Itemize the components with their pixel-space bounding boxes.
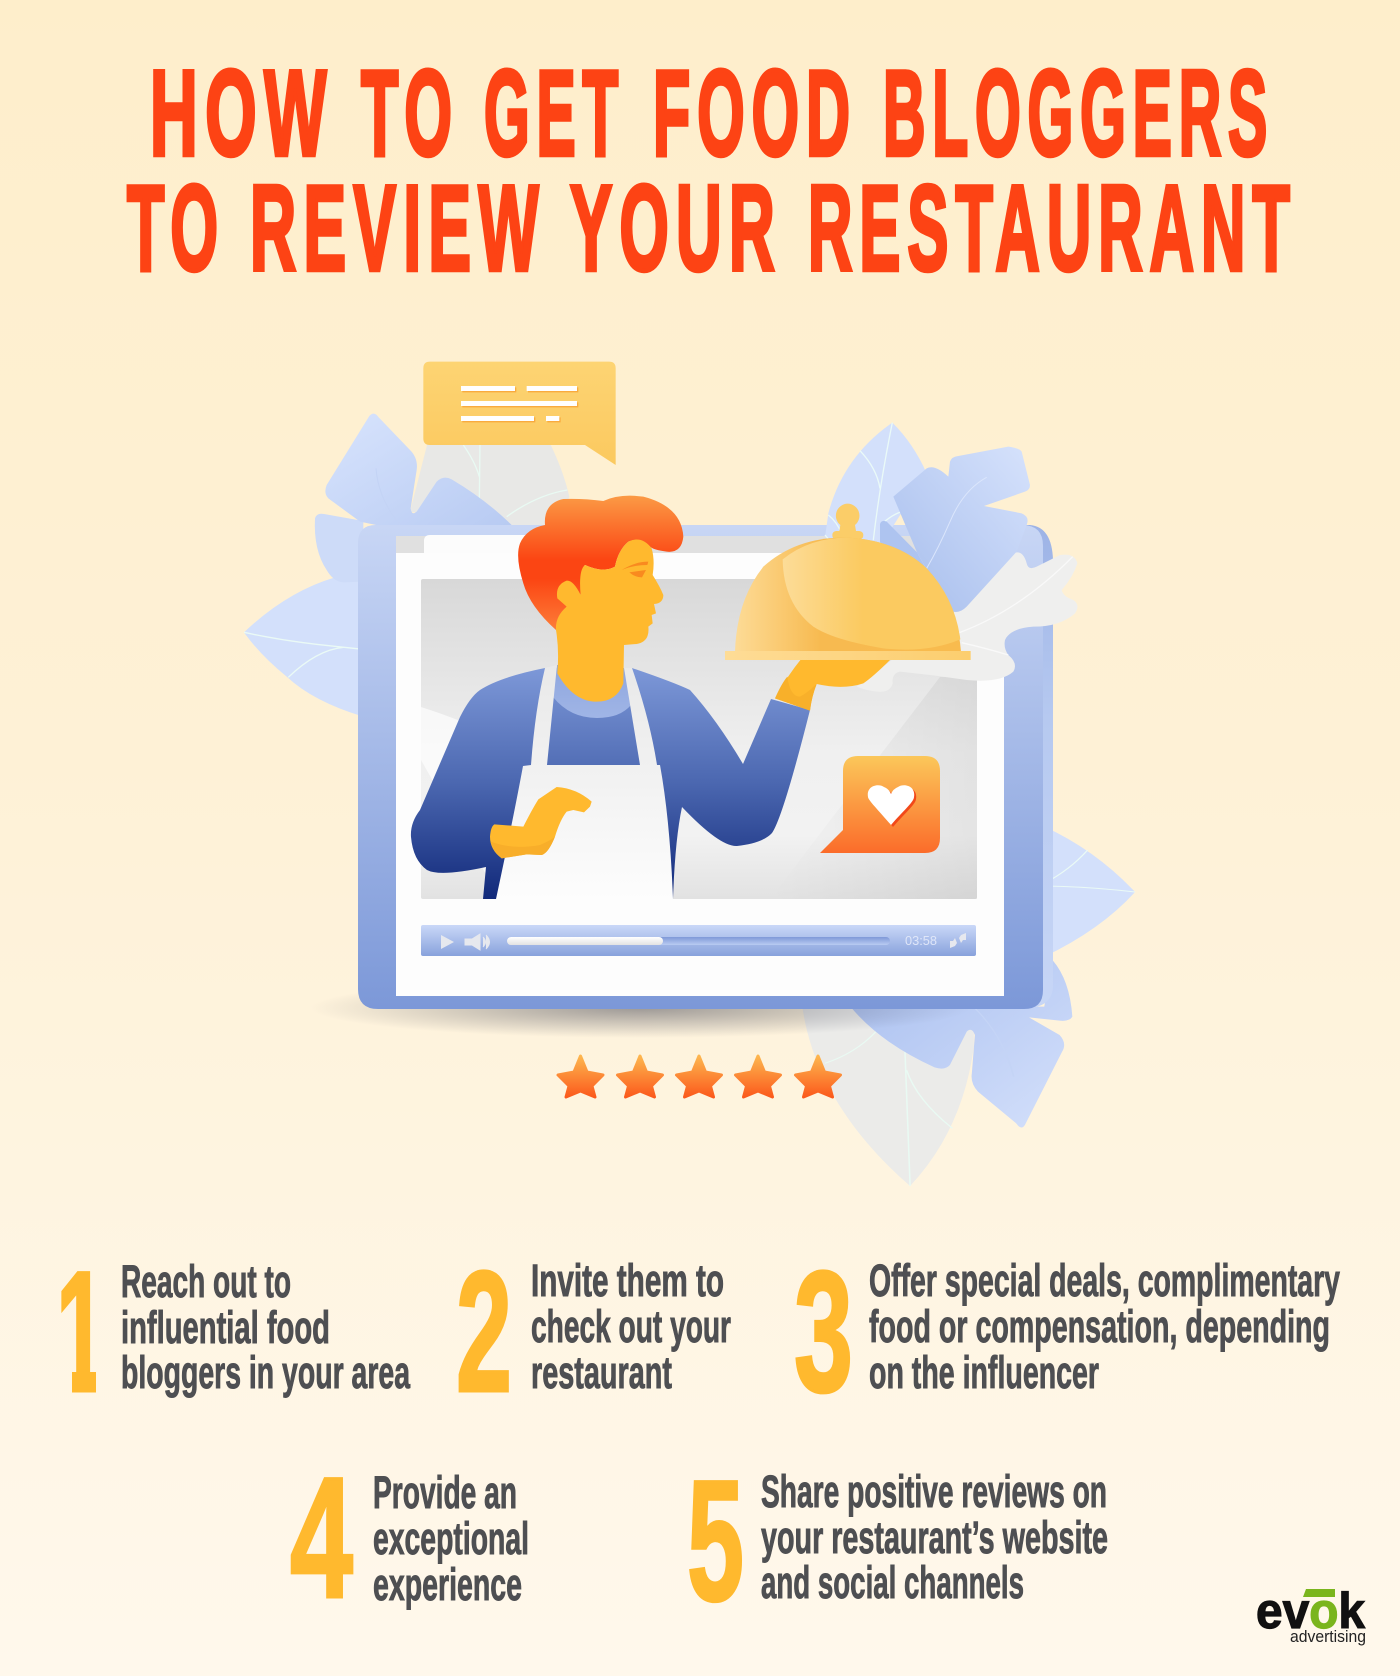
step 5 text: Share positive reviews on bbox=[761, 1466, 1107, 1517]
step 2 text: Invite them to bbox=[531, 1255, 724, 1306]
right hand bbox=[775, 658, 892, 711]
logo bbox=[1256, 1583, 1366, 1646]
step 4 bbox=[290, 1442, 529, 1634]
video player window bbox=[358, 525, 1053, 1009]
screen bbox=[396, 553, 1004, 996]
step 5 text: and social channels bbox=[761, 1557, 1024, 1608]
number 5: 5 bbox=[687, 1445, 744, 1637]
step 1 text: Reach out to bbox=[121, 1256, 291, 1307]
heart bbox=[868, 785, 914, 825]
cloche bbox=[725, 504, 971, 660]
time label: 03:58 bbox=[905, 933, 937, 948]
star 3 bbox=[676, 1056, 722, 1097]
step 1 text: influential food bbox=[121, 1302, 330, 1353]
player frame bbox=[358, 525, 1043, 1009]
player back edge bbox=[1000, 525, 1053, 1008]
step 5 bbox=[687, 1445, 1108, 1637]
number 2: 2 bbox=[456, 1236, 512, 1428]
title: GET bbox=[484, 45, 625, 181]
window chrome bbox=[396, 536, 1004, 554]
step 5 text bbox=[761, 1466, 1108, 1608]
step 4 text: Provide an bbox=[373, 1467, 517, 1518]
logo macron bbox=[1303, 1589, 1335, 1597]
star 2 bbox=[618, 1056, 662, 1097]
logo wordmark: evok bbox=[1256, 1583, 1365, 1639]
bubble box bbox=[820, 756, 940, 853]
apron bbox=[496, 665, 673, 899]
star 5 bbox=[796, 1056, 840, 1097]
logo tagline: advertising bbox=[1290, 1627, 1366, 1646]
title: HOW bbox=[150, 45, 334, 181]
fullscreen icon bbox=[950, 933, 966, 948]
speech bubble bbox=[423, 362, 616, 465]
step 2 text: restaurant bbox=[531, 1347, 672, 1398]
left forearm bbox=[490, 787, 592, 858]
number 4: 4 bbox=[290, 1442, 353, 1634]
heart bubble bbox=[820, 756, 940, 853]
hair bbox=[518, 496, 683, 702]
step 1 text: bloggers in your area bbox=[121, 1347, 411, 1398]
control bar bbox=[421, 925, 976, 956]
step 1 bbox=[61, 1264, 410, 1398]
step 3 bbox=[794, 1236, 1340, 1428]
video shade right bbox=[770, 677, 977, 899]
star 1 bbox=[558, 1056, 603, 1097]
title line two: YOUR bbox=[570, 160, 782, 296]
step 1 text bbox=[121, 1256, 411, 1398]
step 4 text bbox=[373, 1467, 529, 1610]
title line two: REVIEW bbox=[250, 160, 546, 296]
title line two: TO bbox=[127, 160, 225, 296]
heart shadow bbox=[870, 787, 916, 827]
leaves: back left bbox=[244, 414, 569, 717]
window tab bbox=[424, 535, 560, 553]
leaves: back right bbox=[802, 827, 1135, 1186]
illustration bbox=[244, 362, 1135, 1186]
step 2 bbox=[456, 1236, 731, 1428]
title: FOOD bbox=[653, 45, 857, 181]
step 2 text bbox=[531, 1255, 731, 1398]
star 4 bbox=[736, 1056, 780, 1097]
step 5 text: your restaurant’s website bbox=[761, 1512, 1108, 1563]
progress track bbox=[507, 937, 890, 945]
step 4 text: exceptional bbox=[373, 1513, 529, 1564]
chef figure bbox=[411, 496, 892, 899]
step 2 text: check out your bbox=[531, 1301, 731, 1352]
play icon bbox=[441, 935, 454, 949]
video area bbox=[421, 579, 977, 899]
step 3 text: on the influencer bbox=[869, 1347, 1099, 1398]
torso gradient bbox=[411, 668, 810, 899]
leaves: front right bbox=[825, 423, 1077, 692]
collar bbox=[553, 665, 631, 718]
step 4 text: experience bbox=[373, 1559, 522, 1610]
number 3: 3 bbox=[794, 1236, 853, 1428]
star rating bbox=[558, 1056, 840, 1097]
face and neck bbox=[556, 539, 663, 702]
video highlight left bbox=[421, 707, 640, 899]
monitor shadow bbox=[310, 978, 970, 1038]
volume icon bbox=[465, 934, 490, 950]
eye and brow bbox=[622, 562, 648, 577]
title: TO bbox=[361, 45, 459, 181]
step 3 text bbox=[869, 1255, 1340, 1398]
number 1: 1 bbox=[56, 1236, 106, 1428]
progress fill bbox=[507, 937, 663, 945]
